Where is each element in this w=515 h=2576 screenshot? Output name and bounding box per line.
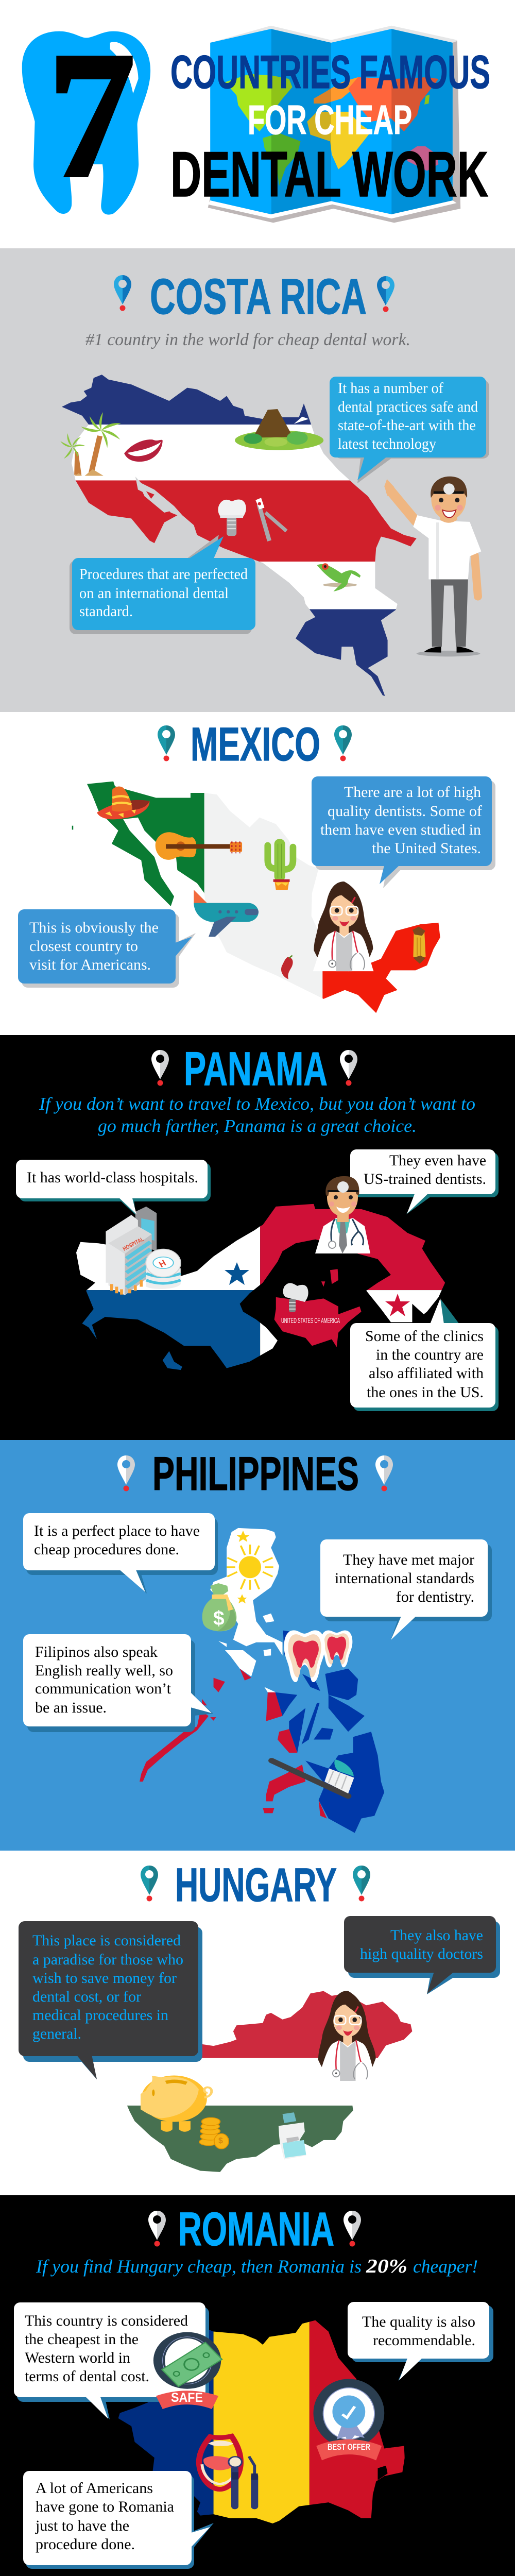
callout: world-class hospitals: It has world-class hospitals. <box>27 1169 198 1186</box>
callout: closest country: visit for Americans. <box>29 956 151 973</box>
pin right <box>375 1455 393 1491</box>
pin left <box>148 2211 166 2246</box>
callout: international standards: for dentistry. <box>396 1588 474 1605</box>
icon: chili <box>281 956 293 979</box>
callout: high quality dentists: There are a lot of high <box>344 784 481 801</box>
callout: high quality dentists: them have even studied in <box>320 821 481 838</box>
pin left <box>151 1050 169 1086</box>
callout: US-trained dentists: US-trained dentists. <box>364 1171 486 1188</box>
badge: best offer <box>313 2379 384 2461</box>
callout: paradise: medical procedures in <box>32 2007 168 2024</box>
pin left <box>117 1455 135 1491</box>
callout: perfect place: It is a perfect place to have <box>34 1522 200 1539</box>
callout: high quality doctors <box>344 1916 500 1994</box>
subtitle: If you find Hungary cheap, then Romania is <box>36 2256 362 2277</box>
character: female dentist <box>317 1991 376 2081</box>
callout: paradise: dental cost, or for <box>32 1988 141 2005</box>
callout: international standards: They have met major <box>343 1551 474 1568</box>
icon: burrito <box>413 927 426 964</box>
callout: quality: The quality is also <box>362 2313 475 2330</box>
callout: international standards: international standards <box>335 1570 474 1587</box>
icon: implant <box>283 1283 308 1312</box>
icon: money bag: $ <box>213 1607 225 1630</box>
callout: affiliated clinics: in the country are <box>376 1346 484 1363</box>
section: Romania <box>0 2195 515 2576</box>
callout: procedures: on an international dental <box>79 585 229 602</box>
callout: paradise <box>19 1921 202 2079</box>
subtitle: cheaper! <box>413 2256 478 2277</box>
callout: dental practices: state-of-the-art with the <box>338 417 476 434</box>
callout: US-trained dentists <box>350 1149 499 1214</box>
icon: dental implant <box>218 500 246 536</box>
icon: blue tooth <box>22 31 150 215</box>
callout: international standards <box>320 1539 492 1640</box>
icon: airplane <box>194 890 259 937</box>
map: Panama flag <box>76 1204 445 1370</box>
numeral 7: 7 <box>48 16 135 214</box>
heading: Philippines: PHILIPPINES <box>152 1448 359 1500</box>
callout: closest country <box>18 909 196 988</box>
section: Panama <box>0 1035 515 1440</box>
icon: dental tools <box>255 498 286 541</box>
pin right <box>334 725 352 761</box>
map: Philippines flag <box>140 1528 384 1833</box>
callout: paradise: This place is considered <box>32 1932 181 1949</box>
icon: open mouth and dental tools <box>199 2436 258 2506</box>
pin left <box>158 725 175 761</box>
badge: safe <box>153 2332 222 2409</box>
icon: mouthwash <box>279 2112 306 2160</box>
icon: sombrero <box>97 787 149 819</box>
callout: high quality doctors: high quality doctors <box>360 1945 483 1962</box>
icon: coins <box>199 2117 229 2149</box>
heading: Mexico: MEXICO <box>191 718 320 771</box>
callout: Americans in Romania <box>23 2471 214 2569</box>
callout: English speakers <box>23 1634 213 1732</box>
character: dentist pointing <box>384 477 481 656</box>
icon: piggy bank <box>141 2076 212 2132</box>
subtitle: go much farther, Panama is a great choice. <box>98 1116 417 1136</box>
icon: red star <box>385 1294 410 1316</box>
callout: affiliated clinics <box>350 1298 499 1411</box>
label: USA: UNITED STATES OF AMERICA <box>281 1316 340 1325</box>
callout: paradise: a paradise for those who <box>32 1951 183 1968</box>
callout: high quality dentists <box>312 776 495 888</box>
pin left <box>114 275 131 311</box>
heading: Panama: PANAMA <box>184 1043 328 1095</box>
heading: Costa Rica: COSTA RICA <box>150 268 367 325</box>
icon: frog <box>317 563 360 591</box>
callout: procedures: Procedures that are perfected <box>79 566 248 583</box>
section: Mexico <box>18 725 495 1013</box>
callout: high quality dentists: the United States. <box>372 840 481 857</box>
callout: procedures: standard. <box>79 603 133 620</box>
callout: quality <box>348 2302 493 2381</box>
icon: smile lips <box>124 439 163 462</box>
icon: palm trees <box>60 412 122 476</box>
subtitle: 20% <box>366 2256 407 2277</box>
callout: cheapest in western world <box>14 2302 209 2419</box>
label: helipad H: H <box>157 1258 168 1269</box>
callout: Americans in Romania: procedure done. <box>36 2536 135 2553</box>
callout: paradise: general. <box>32 2025 81 2042</box>
callout: perfect place: cheap procedures done. <box>34 1541 179 1558</box>
callout: cheapest in western world: the cheapest in the <box>25 2331 139 2348</box>
icon: flag sun and stars <box>227 1531 273 1603</box>
callout: English speakers: be an issue. <box>35 1699 107 1716</box>
pin right <box>377 276 394 312</box>
title: FOR CHEAP <box>248 97 412 143</box>
callout: high quality doctors: They also have <box>390 1927 483 1944</box>
callout: dental practices: latest technology <box>338 435 436 452</box>
callout: cheapest in western world: terms of dental cost. <box>25 2368 149 2385</box>
callout: affiliated clinics: Some of the clinics <box>365 1328 484 1345</box>
callout: affiliated clinics: the ones in the US. <box>367 1384 484 1401</box>
callout: US-trained dentists: They even have <box>389 1152 486 1169</box>
icon: money bag <box>202 1583 236 1631</box>
section: header <box>0 0 515 248</box>
pin right <box>344 2211 361 2246</box>
callout: paradise: wish to save money for <box>32 1970 177 1987</box>
icon: coins: $ <box>218 2137 223 2145</box>
badge: safe: SAFE <box>171 2391 203 2405</box>
callout: English speakers: Filipinos also speak <box>35 1643 158 1660</box>
callout: procedures <box>70 535 255 634</box>
subtitle: #1 country in the world for cheap dental work. <box>85 330 410 349</box>
pin left <box>141 1866 158 1901</box>
callout: Americans in Romania: A lot of Americans <box>36 2480 153 2497</box>
icon: hospital <box>106 1207 181 1295</box>
badge: best offer: BEST OFFER <box>328 2442 370 2452</box>
callout: cheapest in western world: Western world in <box>25 2349 130 2366</box>
callout: Americans in Romania: have gone to Romania <box>36 2498 174 2515</box>
map: Romania flag <box>118 2320 405 2523</box>
icon: volcano <box>235 409 323 450</box>
label: hospital sign: HOSPITAL <box>122 1236 145 1252</box>
pin right <box>340 1050 357 1086</box>
heading: Romania: ROMANIA <box>178 2203 334 2256</box>
callout: dental practices: It has a number of <box>338 380 443 397</box>
callout: world-class hospitals <box>16 1160 211 1215</box>
icon: guitar <box>156 832 242 860</box>
callout: affiliated clinics: also affiliated with <box>369 1365 484 1382</box>
section: Hungary <box>0 1851 515 2195</box>
icon: toothbrush <box>271 1759 354 1796</box>
callout: closest country: closest country to <box>29 938 138 955</box>
icon: cactus <box>268 839 293 890</box>
callout: perfect place <box>23 1513 218 1594</box>
icon: tooth stickers <box>284 1630 352 1682</box>
map: Costa Rica flag <box>62 375 417 696</box>
subtitle <box>39 1094 475 1136</box>
callout: English speakers: English really well, so <box>35 1662 173 1679</box>
subtitle: If you don’t want to travel to Mexico, but you don’t want to <box>39 1094 475 1114</box>
callout: high quality dentists: quality dentists. Some of <box>328 803 482 820</box>
callout: cheapest in western world: This country is considered <box>25 2312 188 2329</box>
icon: blue star <box>225 1262 249 1285</box>
callout: English speakers: communication won’t <box>35 1680 171 1697</box>
callout: dental practices <box>330 377 489 483</box>
character: female dentist <box>313 882 374 971</box>
section: Philippines <box>0 1440 515 1851</box>
heading: Hungary: HUNGARY <box>175 1859 337 1911</box>
title <box>170 46 490 210</box>
callout: closest country: This is obviously the <box>29 919 159 936</box>
illustration: folded world map <box>208 26 460 223</box>
character: male dentist <box>315 1176 370 1253</box>
callout: quality: recommendable. <box>373 2332 475 2349</box>
map: Mexico flag <box>66 778 454 1014</box>
pin right <box>353 1866 370 1901</box>
callout: dental practices: dental practices safe and <box>338 398 478 415</box>
section: Costa Rica <box>0 248 515 712</box>
callout: Americans in Romania: just to have the <box>35 2517 129 2534</box>
map: Hungary flag <box>127 1991 412 2172</box>
